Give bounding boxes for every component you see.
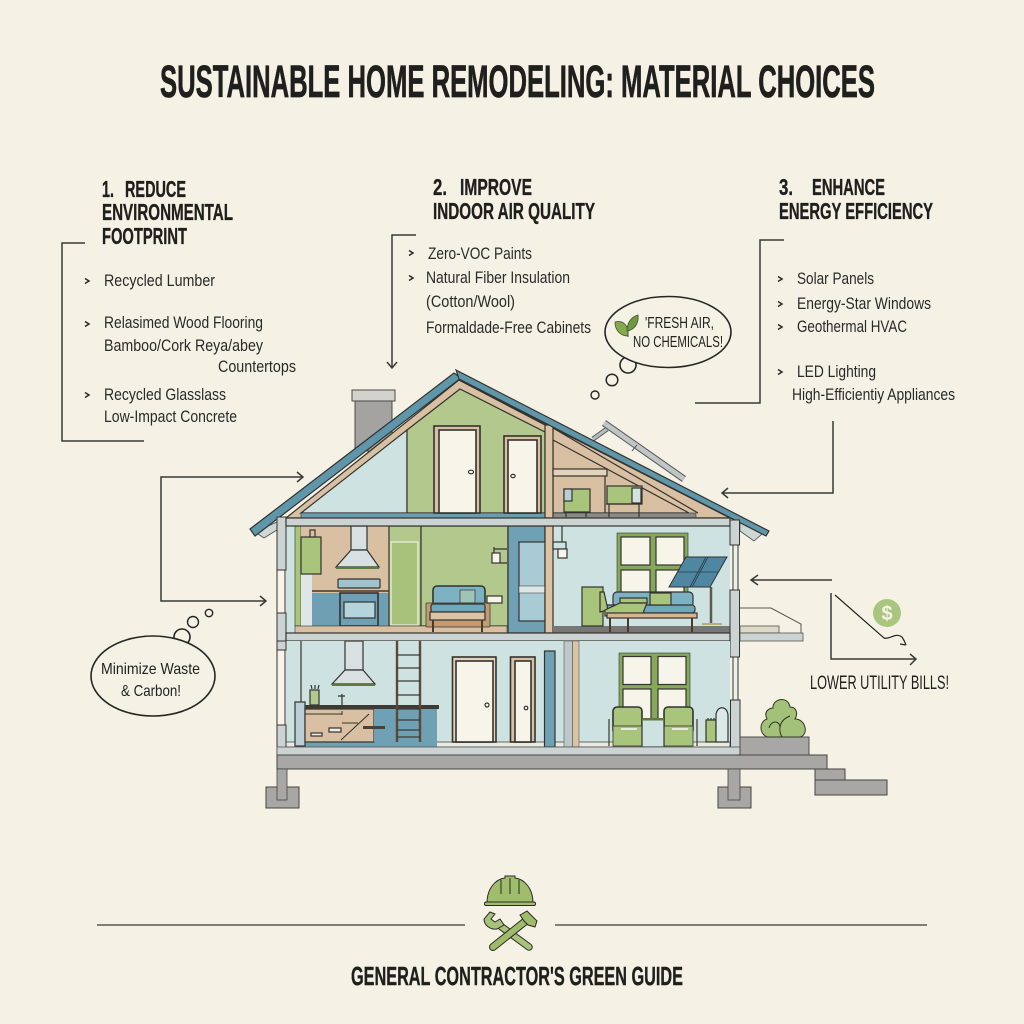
list: section 1 materials: Bamboo/Cork Reya/abey [104, 336, 263, 355]
icon: dollar coin: $ [881, 603, 893, 625]
list: section 1 materials: Recycled Lumber [104, 271, 215, 290]
attic built-ins and storage [553, 469, 642, 517]
lower kitchen [295, 641, 439, 746]
ground storey [277, 641, 740, 755]
heading: section 3: ENHANCE [812, 174, 885, 200]
arrow: section 1 to roof and wall [161, 472, 303, 606]
callout: minimize waste thought bubble: & Carbon! [121, 683, 181, 700]
list: section 3 materials: Energy-Star Windows [797, 294, 931, 313]
blue hallway door [508, 526, 545, 633]
chart: lower utility bills: LOWER UTILITY BILLS! [810, 673, 949, 694]
callout: minimize waste thought bubble: Minimize Waste [101, 661, 200, 678]
list: section 2 materials: (Cotton/Wool) [426, 292, 515, 311]
footer label: GENERAL CONTRACTOR'S GREEN GUIDE [351, 961, 683, 991]
heading: section 2: 2. [433, 174, 447, 200]
living room with sofa [295, 526, 508, 633]
heading: section 1: 1. [102, 176, 114, 202]
list: section 3 materials: Solar Panels [797, 269, 874, 288]
arrow: utility savings to house [751, 575, 832, 585]
lower doors [452, 657, 535, 742]
bedroom with window, sofa and solar panel [553, 526, 730, 633]
icon: green leaves [615, 315, 638, 337]
heading: section 1: FOOTPRINT [102, 223, 187, 249]
chimney [352, 390, 395, 451]
middle storey [277, 517, 740, 657]
footer [97, 876, 927, 991]
heading: section 1: REDUCE [125, 176, 186, 202]
bracket connector: section 1 [62, 243, 144, 441]
umbrella stand and plant [706, 708, 728, 742]
rooftop solar panel rack [593, 423, 684, 479]
callout: fresh air thought bubble: NO CHEMICALS! [633, 334, 723, 351]
heading: section 3: 3. [779, 174, 793, 200]
attic doors [434, 426, 541, 513]
side porch [740, 608, 803, 641]
lower window with chairs [609, 653, 697, 747]
list: section 1 materials [85, 271, 296, 426]
list: section 3 materials: High-Efficientiy Appliances [792, 385, 955, 404]
right wall [730, 520, 740, 657]
list: section 2 materials [409, 244, 591, 337]
list: section 1 materials: Relasimed Wood Flooring [104, 313, 263, 332]
list: section 2 materials: Zero-VOC Paints [428, 244, 532, 263]
kitchen [295, 526, 389, 626]
list: section 2 materials: Natural Fiber Insulation [426, 268, 570, 287]
list: section 2 materials: Formaldade-Free Cabinets [426, 318, 591, 337]
list: section 3 materials: LED Lighting [797, 362, 876, 381]
list: section 1 materials: Low-Impact Concrete [104, 407, 237, 426]
callout: fresh air thought bubble: 'FRESH AIR, [645, 315, 714, 332]
icon: crossed wrench and hammer [484, 911, 537, 947]
heading: section 2 [433, 174, 595, 224]
green door [389, 526, 421, 626]
list: section 1 materials: Recycled Glasslass [104, 385, 226, 404]
icon: hard hat [484, 876, 536, 906]
list: section 3 materials: Geothermal HVAC [797, 317, 907, 336]
heading: section 2: INDOOR AIR QUALITY [433, 198, 595, 224]
heading: section 3: ENERGY EFFICIENCY [779, 198, 933, 224]
bracket connector: section 3 [695, 240, 784, 403]
list: section 1 materials: Countertops [218, 357, 296, 376]
heading: section 1: ENVIRONMENTAL [102, 199, 233, 225]
ladder [396, 641, 421, 742]
heading: section 2: IMPROVE [460, 174, 532, 200]
roof [250, 370, 769, 541]
blue pillar and columns [544, 641, 579, 747]
callout: minimize waste thought bubble [91, 609, 215, 716]
house cross-section illustration [250, 370, 887, 808]
foundation and steps [266, 755, 887, 808]
attic storey [286, 380, 730, 518]
chart: lower utility bills [810, 593, 949, 694]
heading: section 1 [102, 176, 233, 249]
arrow: section 3 to roof [722, 421, 833, 498]
ground floor left wall [277, 641, 286, 755]
arrow: section 2 to house [387, 235, 416, 368]
bush in planter [740, 700, 809, 755]
left wall [277, 517, 286, 650]
ground floor right wall [730, 657, 740, 755]
callout: fresh air thought bubble [591, 296, 731, 399]
list: section 3 materials [778, 269, 955, 404]
panel: reduce environmental footprint [62, 176, 296, 441]
footer divider lines [97, 924, 927, 926]
panel: improve indoor air quality [387, 174, 731, 399]
heading: section 3 [779, 174, 933, 224]
panel: enhance energy efficiency [695, 174, 955, 498]
